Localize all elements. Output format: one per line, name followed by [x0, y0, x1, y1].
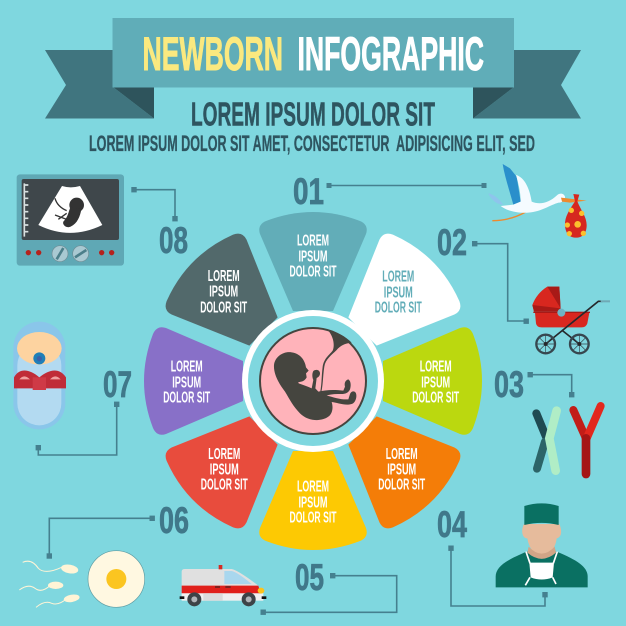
petal 08: DOLOR SIT [200, 299, 247, 316]
title: INFOGRAPHIC [298, 27, 484, 80]
number 02: 02 [437, 222, 467, 263]
icon: sperm cells and egg [19, 551, 145, 607]
petal 01: DOLOR SIT [290, 264, 337, 281]
connector 07 [36, 402, 119, 455]
subtitle: LOREM IPSUM DOLOR SIT [191, 96, 435, 132]
petal 02 [324, 223, 471, 370]
connector 02 [472, 241, 529, 324]
number 05: 05 [295, 557, 324, 598]
petal 06: IPSUM [210, 461, 239, 478]
petal 01: LOREM [297, 233, 329, 250]
petal 07: DOLOR SIT [163, 390, 210, 407]
petal 05: LOREM [297, 479, 329, 496]
petal 03: LOREM [420, 358, 452, 375]
number 04: 04 [437, 504, 467, 545]
icon: stork with bundle [488, 164, 587, 238]
icon: ultrasound monitor [17, 174, 124, 266]
connector 04 [448, 546, 548, 606]
petal 06: LOREM [208, 446, 240, 463]
petal 02: IPSUM [384, 284, 413, 301]
connector 01 [326, 183, 486, 188]
petal 04: DOLOR SIT [378, 477, 425, 494]
petal 05: IPSUM [298, 494, 328, 511]
center embryo emblem [242, 310, 384, 452]
petal 08: IPSUM [209, 283, 238, 300]
petal 07 [144, 327, 243, 435]
petal 03: IPSUM [421, 374, 450, 391]
petal 06: DOLOR SIT [201, 477, 248, 494]
number 07: 07 [103, 364, 132, 405]
petal 07: IPSUM [172, 374, 201, 391]
icon: XY chromosomes [536, 406, 601, 474]
connector 05 [260, 573, 397, 615]
petal 02: LOREM [382, 269, 414, 286]
petal 08 [155, 223, 302, 370]
icon: doctor [496, 503, 588, 587]
number 08: 08 [159, 220, 188, 261]
petal 04 [324, 392, 471, 539]
title: NEWBORN [142, 27, 283, 80]
number 06: 06 [159, 500, 189, 541]
petal 06 [155, 392, 302, 539]
connector 08 [131, 187, 178, 221]
petal 05 [259, 451, 367, 550]
number 03: 03 [494, 364, 524, 405]
petal 03: DOLOR SIT [412, 390, 459, 407]
petal 01 [259, 212, 367, 311]
petal 05: DOLOR SIT [290, 510, 337, 527]
petal 02: DOLOR SIT [375, 300, 422, 317]
banner ribbon [45, 18, 581, 118]
number 01: 01 [293, 171, 324, 212]
petal 03 [383, 327, 482, 435]
petal 01: IPSUM [298, 248, 328, 265]
petal 07: LOREM [171, 358, 203, 375]
petal wheel [144, 212, 482, 550]
icon: baby stroller [532, 287, 610, 353]
connector 03 [528, 372, 574, 397]
petal 04: LOREM [386, 446, 418, 463]
icon: ambulance [180, 565, 266, 606]
petal 04: IPSUM [387, 461, 416, 478]
icon: swaddled baby [13, 322, 66, 429]
connector 06 [47, 516, 155, 559]
petal 08: LOREM [208, 268, 240, 285]
